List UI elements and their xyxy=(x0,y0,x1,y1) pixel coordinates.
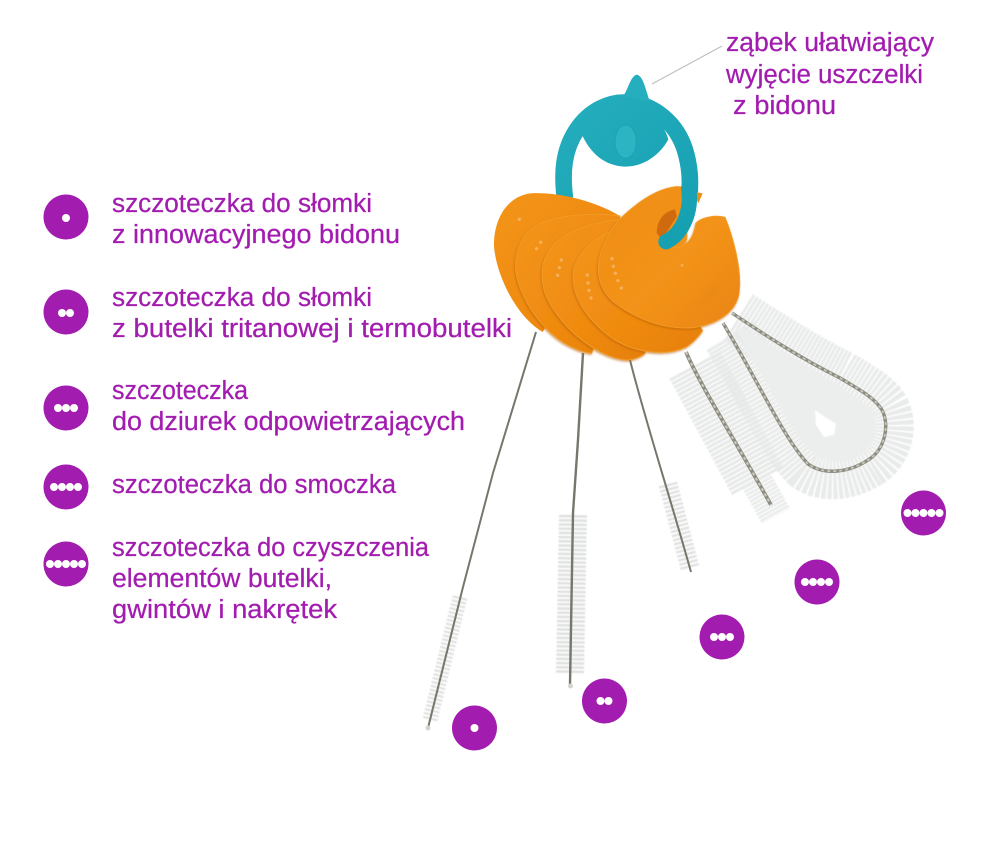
key hole xyxy=(657,209,677,240)
marker 4 xyxy=(794,560,840,604)
marker 5 xyxy=(901,490,946,536)
legend item 5: elementów butelki, xyxy=(112,565,332,593)
legend item 5: szczoteczka do czyszczenia xyxy=(112,534,430,562)
legend item 4 xyxy=(44,464,397,510)
key 5: front key xyxy=(598,187,740,328)
key 3 xyxy=(542,219,645,360)
brush 2: long straight brush xyxy=(568,353,583,688)
legend item 3: szczoteczka xyxy=(112,377,249,405)
brush 5: large loop brush xyxy=(723,313,886,471)
callout: tooth label xyxy=(725,29,934,120)
icon: teal tooth xyxy=(623,75,650,102)
icon: teal ring back part xyxy=(564,103,690,198)
brush 3: small thin brush xyxy=(630,360,691,572)
legend item 5 xyxy=(44,534,430,624)
leader line to tooth xyxy=(652,46,722,84)
marker 1 xyxy=(452,706,497,750)
legend item 3 xyxy=(44,377,465,436)
logo mark on key xyxy=(697,283,718,305)
legend item 3: do dziurek odpowietrzających xyxy=(112,408,465,436)
key 4 xyxy=(573,230,703,352)
orange tip behind ring xyxy=(693,192,703,203)
legend item 1: z innowacyjnego bidonu xyxy=(112,221,400,249)
legend item 1 xyxy=(44,190,400,249)
legend item 1: szczoteczka do słomki xyxy=(112,190,372,218)
icon: teal ring front part xyxy=(666,188,689,242)
brush 4: medium brush xyxy=(686,352,776,516)
legend item 5: gwintów i nakrętek xyxy=(112,596,337,624)
legend item 2: z butelki tritanowej i termobutelki xyxy=(112,315,512,343)
cleaning tool: teal ring and orange keys xyxy=(494,75,740,360)
dots on keys xyxy=(518,218,683,300)
legend item 4: szczoteczka do smoczka xyxy=(112,471,397,499)
callout: tooth label: z bidonu xyxy=(733,92,836,120)
marker 2 xyxy=(582,678,627,724)
key 1 xyxy=(494,193,620,332)
brush 1: long angled brush xyxy=(426,332,536,730)
callout: tooth label: ząbek ułatwiający xyxy=(726,29,934,57)
callout: tooth label: wyjęcie uszczelki xyxy=(725,61,923,89)
legend item 2 xyxy=(44,284,512,343)
key 2 xyxy=(516,214,620,353)
icon: teal inner disc xyxy=(582,108,668,167)
marker 3 xyxy=(700,614,744,660)
legend item 2: szczoteczka do słomki xyxy=(112,284,372,312)
